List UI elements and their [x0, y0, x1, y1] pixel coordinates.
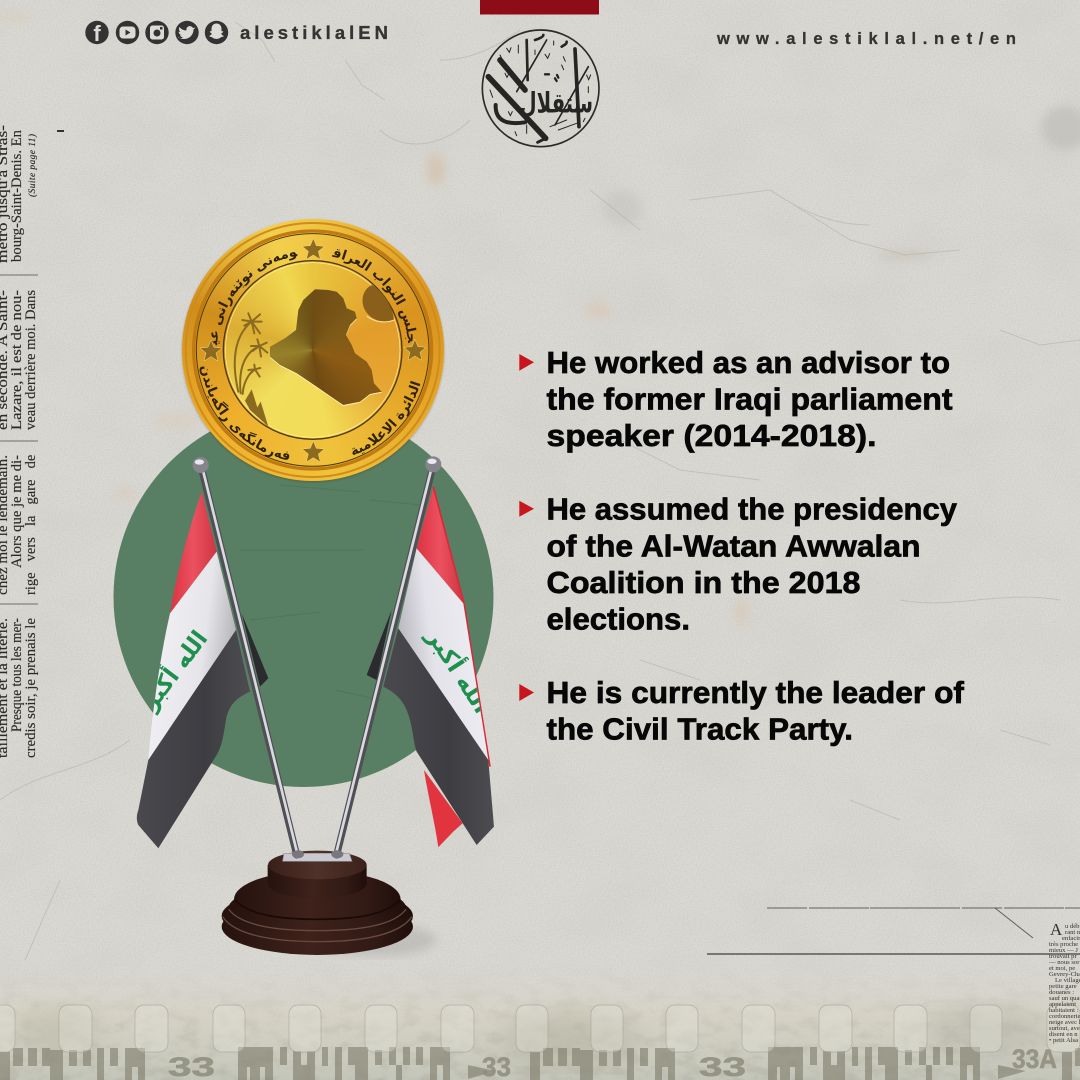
medal rings, stars, palms and lettering	[184, 222, 440, 478]
medal rings, stars, palms and lettering: فەرمانگەی راگەیاندن	[200, 366, 290, 460]
newspaper clipping, bottom right: petite gare	[1049, 983, 1077, 990]
point 3: He is currently the leader of	[546, 675, 965, 710]
newspaper clipping, left edge (rotated): veau derrière moi. Dans	[23, 290, 39, 430]
point 2: of the Al-Watan Awwalan	[546, 528, 920, 564]
newspaper clipping, bottom right: et moi, pe	[1049, 965, 1075, 972]
social handle: alestiklalEN	[240, 22, 388, 43]
calligraphic logo: ستقلال	[520, 86, 593, 119]
table flags on stand	[136, 456, 494, 958]
medal rings, stars, palms and lettering: الدائرة الاعلامية	[352, 380, 420, 455]
newspaper clipping, left edge (rotated): credis soir, je prenais le	[23, 618, 39, 758]
left flag	[134, 492, 268, 848]
newspaper clipping, bottom right: rant n	[1065, 929, 1080, 936]
right flag: الله أكبر	[420, 621, 498, 718]
point 2	[519, 492, 958, 636]
newspaper clipping, bottom right: trouvait pr	[1049, 953, 1077, 960]
point 2: elections.	[546, 602, 690, 636]
stand shadow	[310, 923, 437, 957]
social icons: f	[93, 21, 101, 46]
flag poles	[193, 456, 441, 858]
newspaper clipping, bottom right: A	[1050, 920, 1063, 939]
point 3	[519, 675, 965, 746]
newspaper clipping, left edge (rotated): bourg-Saint-Denis. En	[9, 129, 25, 262]
point 1: speaker (2014-2018).	[546, 418, 876, 453]
gold parliament medal	[182, 219, 444, 481]
newspaper clipping, left edge (rotated): rige vers la gare de	[23, 455, 39, 595]
point 1	[519, 345, 952, 453]
newspaper clipping, bottom right: appelaient	[1049, 1001, 1076, 1008]
point 2: Coalition in the 2018	[546, 565, 860, 600]
newspaper clipping, bottom right: très proche	[1049, 941, 1078, 948]
newspaper clipping, bottom right: — nous sor	[1048, 959, 1080, 966]
newspaper clipping, bottom right: surtout, ave	[1049, 1025, 1080, 1032]
newspaper clipping, bottom right: douanes :	[1049, 989, 1074, 996]
point 1: He worked as an advisor to	[546, 345, 950, 380]
point 2: He assumed the presidency	[546, 492, 958, 526]
inner gold disc	[225, 262, 401, 438]
website url: www.alestiklal.net/en	[716, 30, 1016, 48]
newspaper clipping, bottom right: habitaient :	[1049, 1007, 1079, 1014]
newspaper clipping, bottom right: mieux — J	[1049, 947, 1078, 954]
wooden stand	[222, 851, 413, 955]
right flag	[367, 487, 498, 847]
point 3: the Civil Track Party.	[546, 712, 853, 746]
red top tab	[480, 0, 599, 14]
newspaper clipping, left edge (rotated): Alors que je me di-	[9, 455, 25, 568]
calligraphic logo	[482, 30, 599, 147]
social icons	[85, 21, 228, 46]
newspaper clipping, bottom right: • petit Alsa	[1049, 1037, 1078, 1044]
left flag: الله أكبر	[134, 624, 213, 716]
newspaper clipping, left edge (rotated): (Suite page 11)	[27, 133, 38, 197]
newspaper clipping, left edge (rotated): Lazare, il est de nou-	[9, 290, 25, 430]
newspaper clipping, bottom right: disent en n	[1049, 1031, 1078, 1038]
newspaper clipping, left edge (rotated): Presque tous les mer-	[9, 618, 25, 732]
map of Iraq	[270, 289, 382, 406]
point 1: the former Iraqi parliament	[546, 382, 952, 416]
film strip ruler at the bottom: 33A	[1012, 1044, 1057, 1074]
